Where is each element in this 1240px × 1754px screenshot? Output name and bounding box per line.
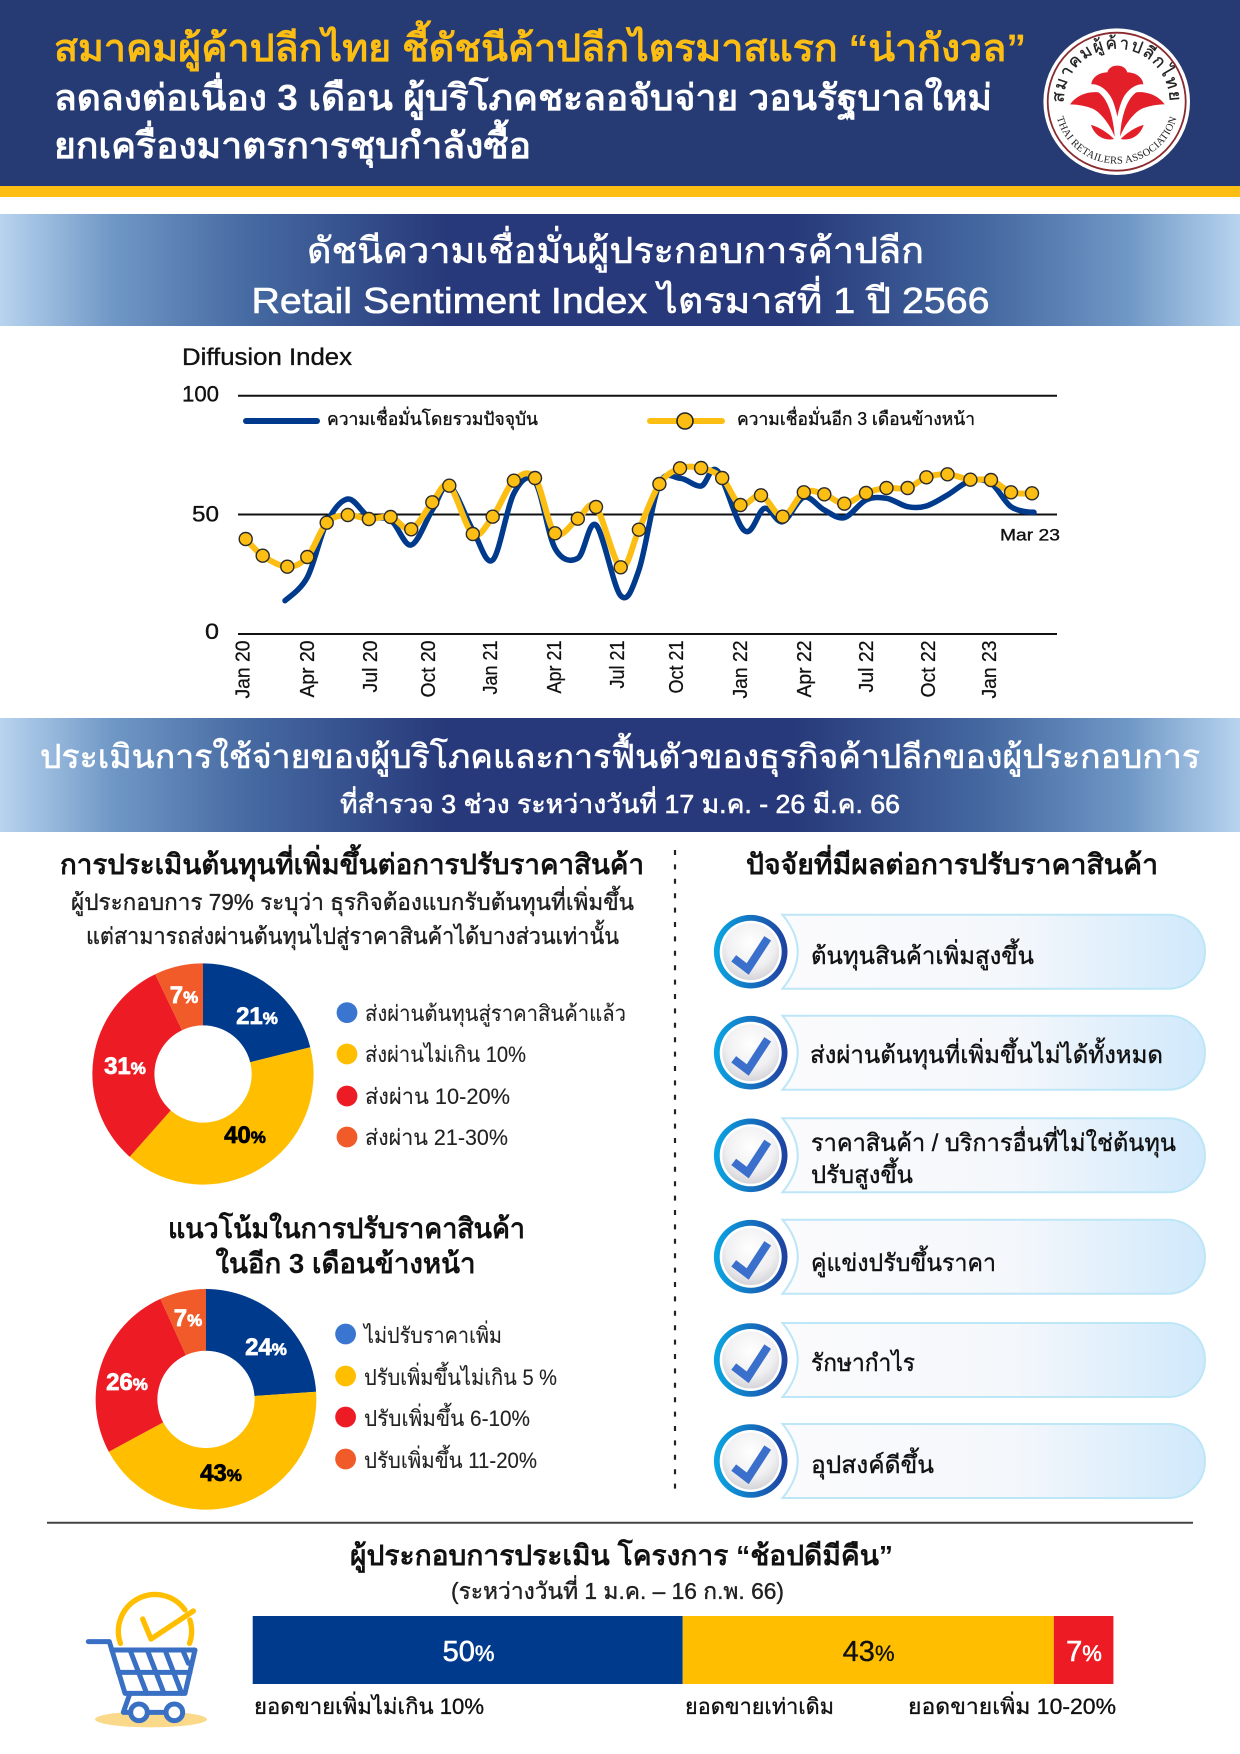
section band: retail sentiment index: Retail Sentiment Index ไตรมาสที่ 1 ปี 2566	[252, 276, 990, 321]
panel heading: แนวโน้มในการปรับราคาสินค้า	[168, 1211, 525, 1244]
x axis labels: Apr 20	[297, 640, 319, 698]
factor 2	[714, 1016, 1205, 1090]
legend: ความเชื่อมั่นอีก 3 เดือนข้างหน้า	[737, 406, 975, 429]
series: current confidence	[285, 469, 1034, 601]
logo: Thai Retailers Association	[1043, 28, 1190, 175]
factor 1	[714, 915, 1205, 989]
factor 5	[714, 1323, 1205, 1397]
section band: consumer spending assessment: ประเมินการใช้จ่ายของผู้บริโภคและการฟื้นตัวของธุรกิจค้าปลีกของผู้ประกอบการ	[40, 733, 1200, 777]
panel heading: ปัจจัยที่มีผลต่อการปรับราคาสินค้า	[746, 844, 1158, 880]
x axis labels: Oct 22	[918, 640, 940, 698]
factor 4	[714, 1220, 1205, 1294]
stacked bar: 43%	[843, 1636, 895, 1668]
factor 2: ส่งผ่านต้นทุนที่เพิ่มขึ้นไม่ได้ทั้งหมด	[810, 1037, 1163, 1070]
donut chart: cost pass-through: 7%	[170, 982, 198, 1009]
donut chart: cost pass-through: 31%	[104, 1053, 146, 1080]
x axis labels	[232, 640, 1001, 698]
factor 3	[714, 1118, 1205, 1192]
logo: Thai Retailers Association: สมาคมผู้ค้าปลีกไทย	[1054, 34, 1180, 102]
panel: price trend	[96, 1211, 557, 1510]
legend: ความเชื่อมั่นโดยรวมปัจจุบัน	[327, 406, 538, 430]
legend: cost pass-through: ส่งผ่านต้นทุนสู่ราคาสินค้าแล้ว	[365, 1001, 626, 1027]
panel heading: การประเมินต้นทุนที่เพิ่มขึ้นต่อการปรับราคาสินค้า	[60, 843, 644, 882]
section band: consumer spending assessment	[0, 718, 1240, 832]
x axis labels: Jan 22	[730, 640, 752, 698]
factor 3: ราคาสินค้า / บริการอื่นที่ไม่ใช่ต้นทุน	[811, 1126, 1176, 1158]
bar labels	[254, 1691, 1116, 1719]
x axis labels: Jan 20	[232, 640, 254, 698]
x axis labels: Jul 21	[607, 640, 629, 688]
factor 6: อุปสงค์ดีขึ้น	[811, 1447, 934, 1480]
donut chart: cost pass-through	[92, 963, 314, 1185]
panel description: ผู้ประกอบการ 79% ระบุว่า ธุรกิจต้องแบกรับต้นทุนที่เพิ่มขึ้น	[71, 886, 634, 916]
y axis grid and labels: 100	[182, 382, 219, 407]
factor 4: คู่แข่งปรับขึ้นราคา	[811, 1245, 996, 1278]
stacked bar	[253, 1616, 1113, 1684]
x axis labels: Jan 21	[480, 640, 502, 694]
panel heading: ผู้ประกอบการประเมิน โครงการ “ช้อปดีมีคืน”	[350, 1538, 893, 1573]
date range: (ระหว่างวันที่ 1 ม.ค. – 16 ก.พ. 66)	[451, 1575, 784, 1604]
legend: cost pass-through	[337, 1001, 626, 1150]
x axis labels: Oct 20	[418, 640, 440, 698]
stacked bar: 7%	[1066, 1636, 1102, 1668]
section band: retail sentiment index: ดัชนีความเชื่อมั่นผู้ประกอบการค้าปลีก	[307, 226, 924, 273]
donut chart: price trend: 43%	[200, 1460, 242, 1487]
donut chart: price trend: 24%	[245, 1334, 287, 1361]
logo: Thai Retailers Association: THAI RETAILERS ASSOCIATION	[1057, 116, 1176, 164]
factor 6	[714, 1424, 1205, 1498]
panel: cost assessment	[60, 843, 644, 1185]
section band: consumer spending assessment: ที่สำรวจ 3 ช่วง ระหว่างวันที่ 17 ม.ค. - 26 มี.ค. 66	[340, 786, 900, 819]
x axis labels: Jan 23	[979, 640, 1001, 698]
factor 1: ต้นทุนสินค้าเพิ่มสูงขึ้น	[811, 938, 1034, 971]
legend: cost pass-through: ส่งผ่าน 21-30%	[365, 1125, 508, 1150]
factor 3: ปรับสูงขึ้น	[811, 1157, 913, 1190]
bar labels: ยอดขายเท่าเดิม	[685, 1694, 834, 1719]
y axis grid and labels: 50	[192, 502, 219, 527]
legend: cost pass-through: ส่งผ่าน 10-20%	[365, 1084, 510, 1109]
x axis labels: Jul 20	[360, 640, 382, 692]
icon: shopping cart with check	[88, 1594, 207, 1727]
panel heading	[168, 1211, 525, 1279]
panel: price adjustment factors	[714, 844, 1205, 1498]
legend: price trend: ไม่ปรับราคาเพิ่ม	[362, 1320, 502, 1348]
panel description	[71, 886, 634, 950]
legend: price trend: ปรับเพิ่มขึ้น 11-20%	[364, 1445, 537, 1473]
donut chart: cost pass-through: 21%	[236, 1003, 278, 1030]
donut chart: price trend: 7%	[174, 1305, 202, 1332]
legend: price trend	[335, 1320, 557, 1473]
legend: price trend: ปรับเพิ่มขึ้น 6-10%	[364, 1403, 530, 1431]
donut chart: price trend	[96, 1289, 316, 1510]
x axis labels: Apr 21	[544, 640, 566, 694]
donut chart: price trend: 26%	[106, 1369, 148, 1396]
x axis labels: Apr 22	[794, 640, 816, 698]
x axis labels: Jul 22	[856, 640, 878, 692]
y axis grid and labels: 0	[205, 619, 219, 644]
legend	[246, 406, 975, 430]
bar labels: ยอดขายเพิ่มไม่เกิน 10%	[254, 1691, 484, 1719]
panel description: แต่สามารถส่งผ่านต้นทุนไปสู่ราคาสินค้าได้บางส่วนเท่านั้น	[86, 920, 619, 950]
panel heading: ในอีก 3 เดือนข้างหน้า	[216, 1247, 476, 1279]
stacked bar: 50%	[443, 1636, 494, 1668]
donut chart: cost pass-through: 40%	[224, 1122, 266, 1149]
legend: cost pass-through: ส่งผ่านไม่เกิน 10%	[365, 1042, 526, 1067]
headline line 3: ยกเครื่องมาตรการชุบกำลังซื้อ	[54, 119, 531, 169]
factor 5: รักษากำไร	[811, 1349, 915, 1377]
axis title: Diffusion Index	[182, 344, 352, 371]
panel: shop dee mee kuen evaluation	[88, 1538, 1116, 1727]
y axis grid and labels	[182, 382, 1057, 644]
line chart: diffusion index	[182, 344, 1060, 698]
end label: Mar 23	[1000, 526, 1060, 545]
headline line 1: สมาคมผู้ค้าปลีกไทย ชี้ดัชนีค้าปลีกไตรมาสแรก “น่ากังวล”	[54, 20, 1026, 72]
bar labels: ยอดขายเพิ่ม 10-20%	[908, 1691, 1116, 1719]
series: three-month outlook	[239, 462, 1038, 574]
header banner	[0, 0, 1240, 197]
legend: price trend: ปรับเพิ่มขึ้นไม่เกิน 5 %	[364, 1362, 557, 1390]
headline line 2: ลดลงต่อเนื่อง 3 เดือน ผู้บริโภคชะลอจับจ่าย วอนรัฐบาลใหม่	[54, 72, 992, 121]
x axis labels: Oct 21	[666, 640, 688, 694]
section band: retail sentiment index	[0, 214, 1240, 326]
